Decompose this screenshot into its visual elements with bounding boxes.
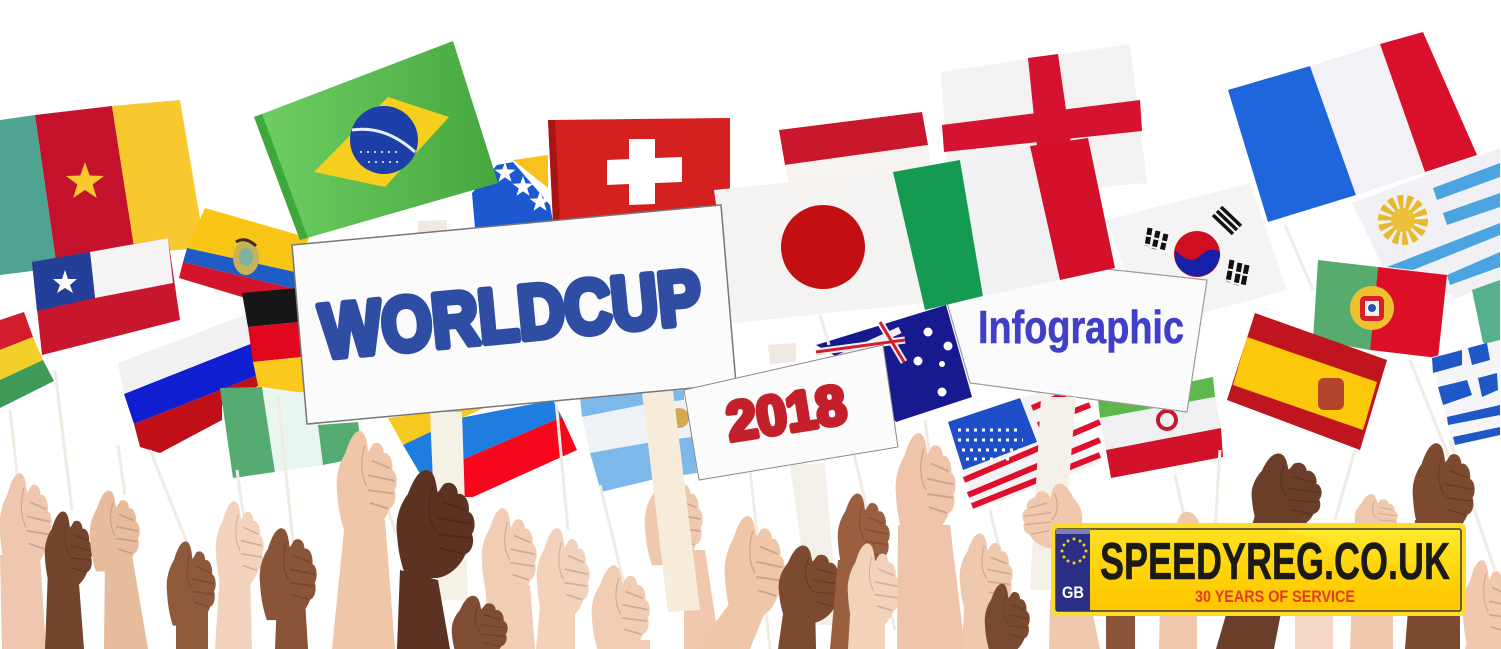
flag: Bosnia	[472, 155, 553, 228]
sign: 2018: 2018	[722, 373, 850, 453]
sign: WORLDCUP	[292, 205, 736, 424]
flag: USA	[948, 392, 1100, 510]
wooden tab: behind signs	[768, 343, 796, 364]
text: Infographic: Infographic	[978, 301, 1184, 353]
number plate logo: SpeedyReg	[1051, 523, 1466, 616]
EU band: GB	[1062, 583, 1084, 602]
wooden sign stick: Worldcup top tab	[418, 220, 447, 236]
flag: Cameroon	[0, 100, 205, 275]
flag: Spain	[1227, 313, 1387, 450]
sign: 2018	[684, 345, 898, 480]
flag: Italy	[893, 138, 1115, 310]
flag: South Korea	[1107, 183, 1287, 313]
flag: Nigeria	[220, 387, 363, 478]
flag: Argentina	[580, 390, 697, 492]
flag: Russia	[118, 313, 260, 453]
flag: Bolivia	[0, 312, 54, 408]
EU band	[1056, 529, 1090, 611]
flag: right edge green	[1472, 280, 1500, 347]
plate tagline: 30 YEARS OF SERVICE	[1195, 587, 1355, 606]
flag: Indonesia	[779, 112, 932, 190]
flag: Australia	[816, 305, 972, 422]
flag: England	[941, 44, 1147, 200]
flag: Greece	[1432, 340, 1500, 447]
flag: Chile	[32, 238, 180, 355]
wooden sign stick: centre	[642, 390, 700, 612]
wooden sign stick: Worldcup	[430, 412, 468, 600]
flag: Portugal	[1313, 260, 1447, 358]
wooden sign stick: Infographic	[1030, 397, 1076, 590]
sign board: Infographic	[932, 250, 1207, 412]
flag: Japan	[714, 172, 925, 323]
flag: Germany	[242, 288, 305, 395]
flag: Brazil	[254, 41, 498, 240]
flag: Iran	[1098, 377, 1223, 478]
flag: France	[1228, 32, 1477, 222]
flag: Colombia	[388, 400, 577, 497]
flag: Ecuador	[179, 208, 309, 297]
flag sticks	[10, 225, 1495, 649]
sign: WORLDCUP: WORLDCUP	[317, 254, 705, 375]
wooden sign stick: 2018	[790, 463, 838, 625]
raised hands	[0, 431, 1501, 649]
flag: Uruguay	[1352, 148, 1500, 298]
flag: Switzerland	[548, 118, 730, 222]
